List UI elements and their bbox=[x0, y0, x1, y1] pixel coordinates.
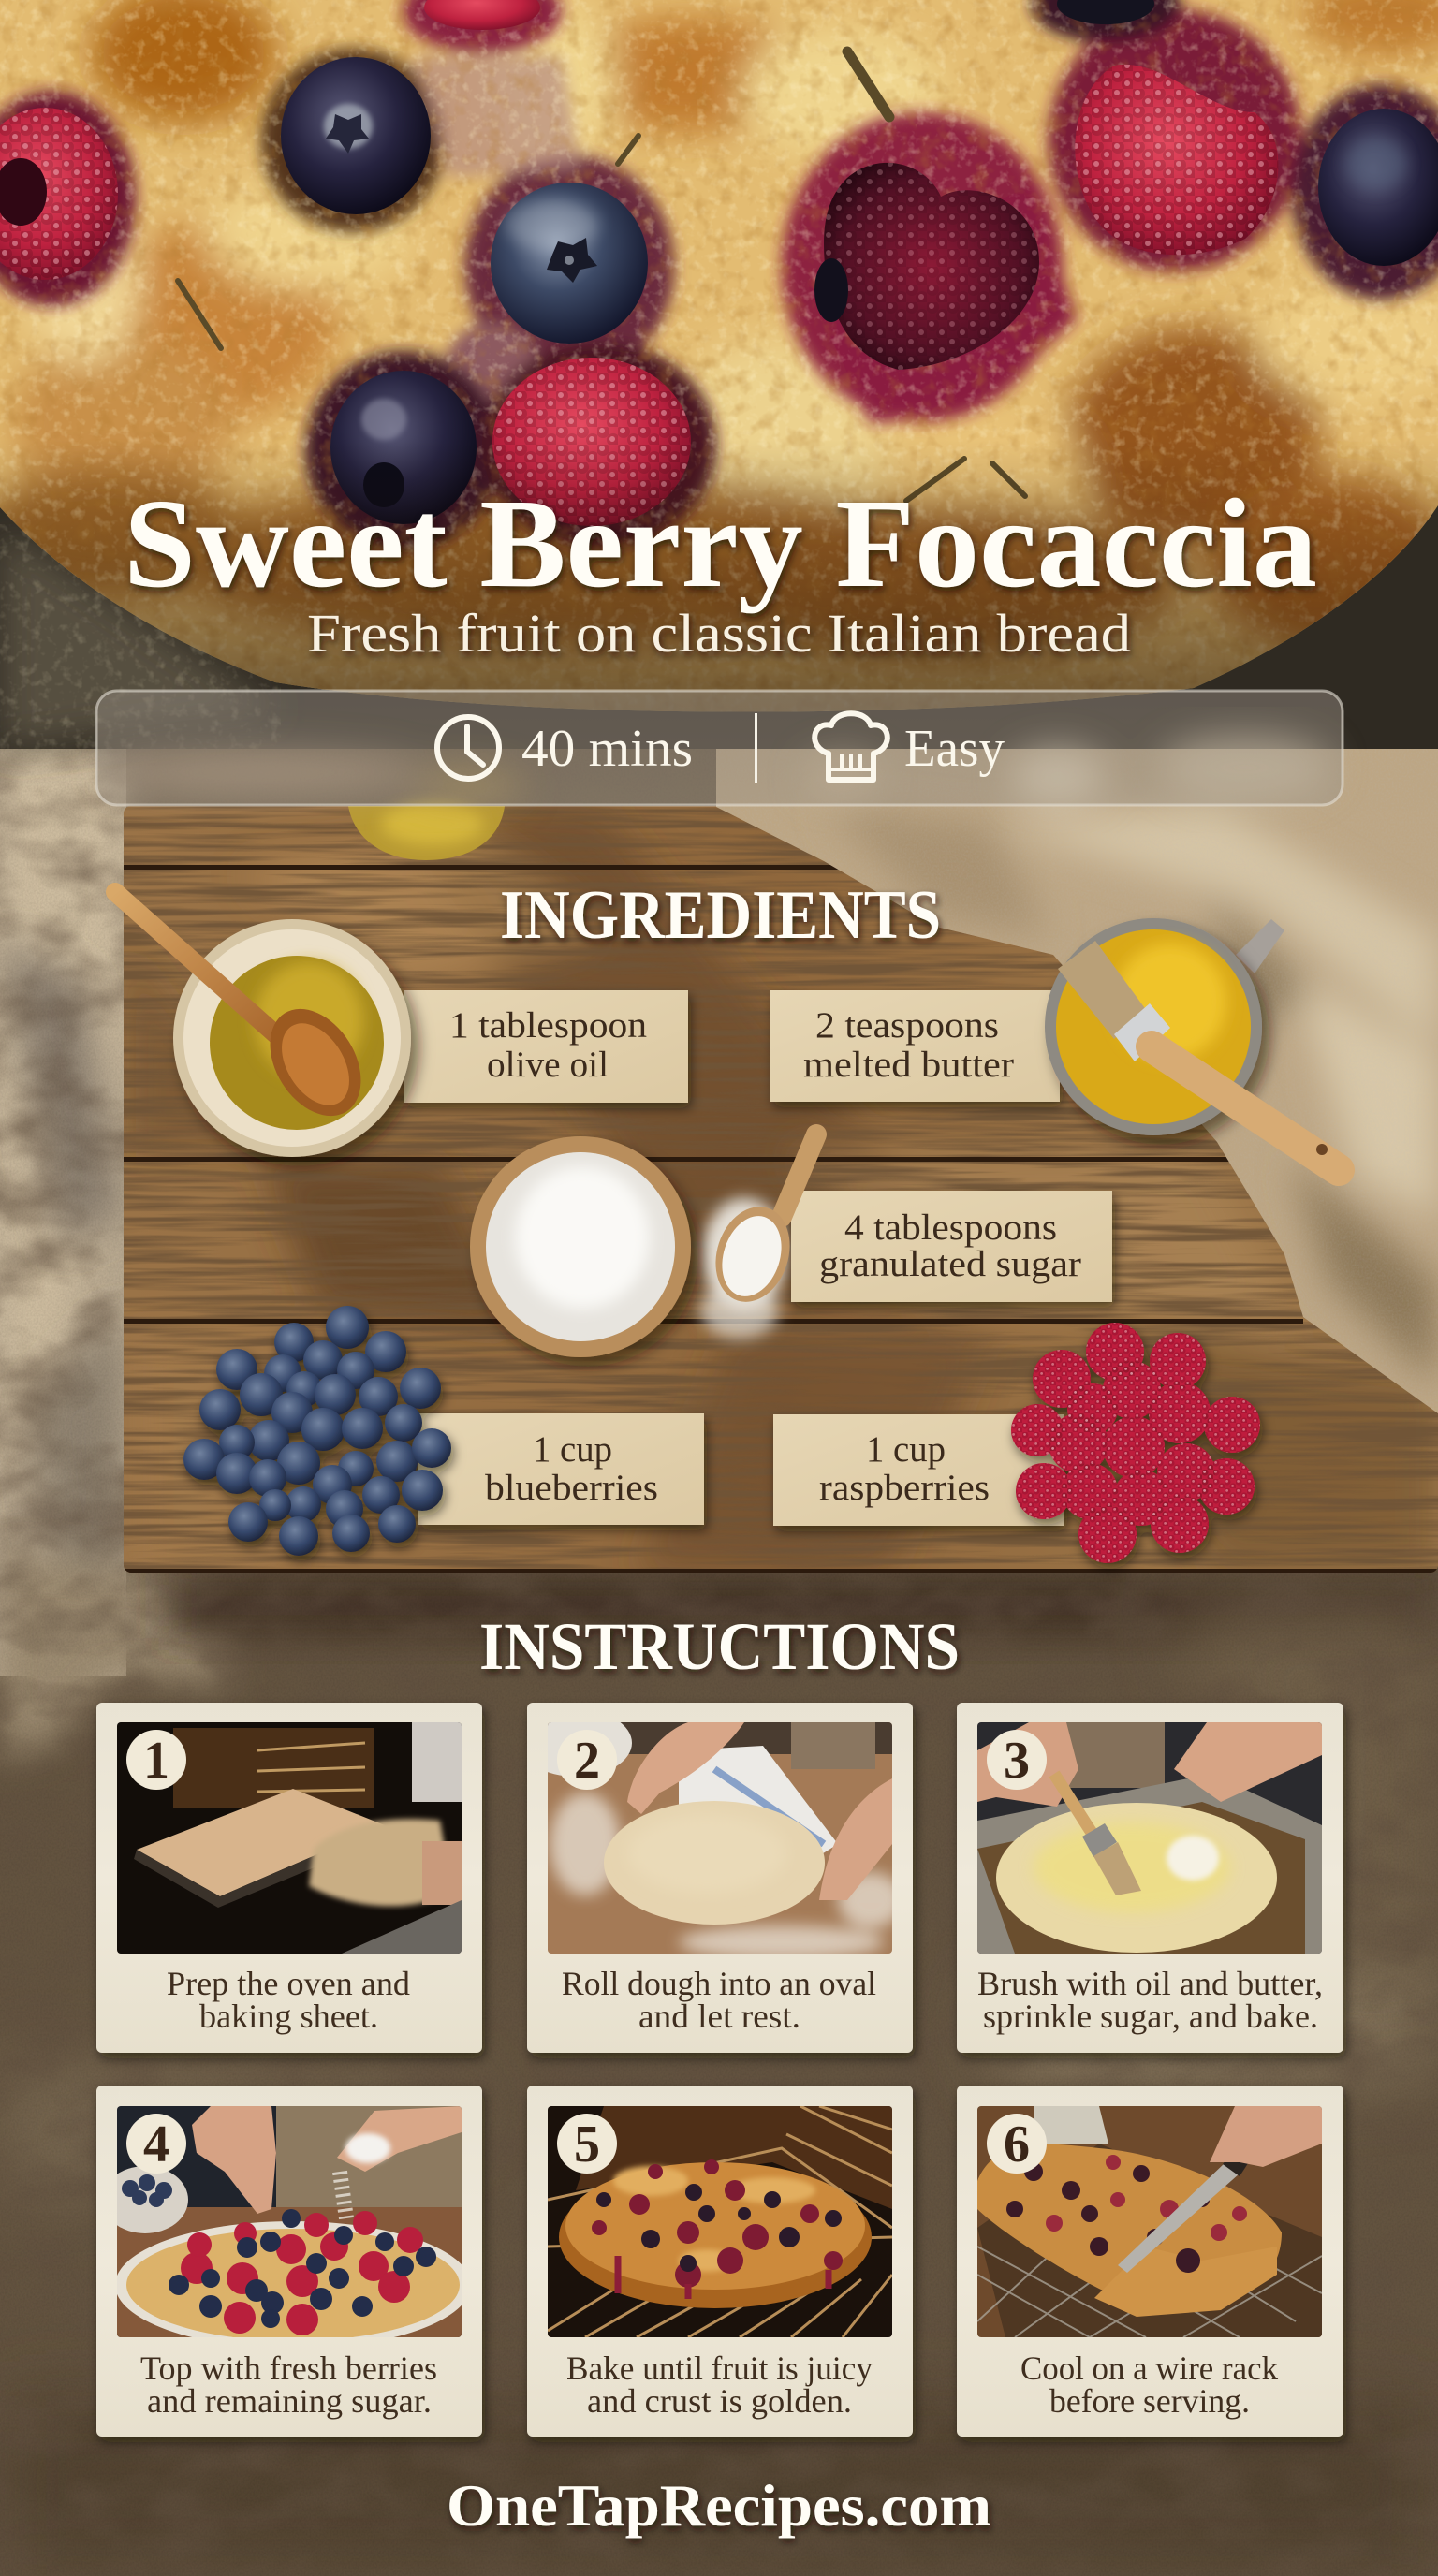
step 3 number: 3 bbox=[1004, 1732, 1030, 1790]
icon: sugar bowl bbox=[470, 1136, 691, 1357]
step 3 number bbox=[987, 1730, 1047, 1790]
step 5 number: 5 bbox=[574, 2115, 600, 2174]
wooden table bbox=[124, 806, 1438, 1573]
bread bumps bbox=[0, 0, 1438, 749]
step 2 number: 2 bbox=[574, 1732, 600, 1790]
ingredient: melted butter bbox=[770, 918, 1339, 1170]
berry: baked dark raspberry bbox=[814, 163, 1039, 370]
label: blueberries: 1 cup bbox=[533, 1429, 612, 1470]
label: melted butter: 2 teaspoons bbox=[815, 1005, 999, 1046]
step 6 text: before serving. bbox=[1049, 2382, 1250, 2420]
sugar spill bbox=[700, 1198, 786, 1339]
step 1 text: baking sheet. bbox=[199, 1998, 378, 2035]
label: sugar bbox=[791, 1191, 1112, 1302]
berry: raspberry top right bbox=[1075, 65, 1278, 255]
step 4 photo: topping with berries bbox=[102, 2106, 471, 2349]
step card 3 bbox=[957, 1703, 1343, 2053]
step 2 text: and let rest. bbox=[638, 1998, 800, 2035]
berry: raspberry top edge bbox=[424, 0, 540, 30]
step 4 text: and remaining sugar. bbox=[147, 2382, 432, 2420]
label: sugar: 4 tablespoons bbox=[844, 1208, 1057, 1248]
label: melted butter: melted butter bbox=[803, 1045, 1014, 1085]
step 1 number bbox=[126, 1730, 186, 1790]
icon: butter pan with brush bbox=[1045, 918, 1339, 1170]
label: sugar: granulated sugar bbox=[819, 1244, 1081, 1284]
step 6 number bbox=[987, 2114, 1047, 2174]
step 5 text: and crust is golden. bbox=[587, 2382, 852, 2420]
step 5 number bbox=[557, 2114, 617, 2174]
step 6 photo: cooling and slicing bbox=[977, 2106, 1322, 2337]
berry: raspberry left bbox=[0, 108, 118, 280]
ingredient: sugar bbox=[470, 1134, 1112, 1357]
berry: blueberry right bbox=[1318, 109, 1438, 266]
plank gaps bbox=[124, 865, 1438, 1573]
step 4 number: 4 bbox=[143, 2115, 169, 2174]
herb flecks bbox=[178, 51, 1025, 501]
footer website: OneTapRecipes.com bbox=[447, 2472, 991, 2539]
step card 1 bbox=[96, 1703, 482, 2053]
berry: blueberry centre bbox=[491, 183, 648, 344]
berry: raspberry lower bbox=[492, 358, 691, 526]
divider bbox=[755, 713, 757, 783]
icon: clock bbox=[437, 717, 499, 779]
title: Sweet Berry Focaccia bbox=[124, 474, 1317, 614]
label: olive oil: olive oil bbox=[487, 1045, 609, 1085]
step 5 text bbox=[566, 2349, 873, 2420]
icon: blueberry pile bbox=[183, 1306, 451, 1556]
step 4 text bbox=[140, 2349, 437, 2420]
difficulty text: Easy bbox=[904, 720, 1005, 778]
label: olive oil: 1 tablespoon bbox=[449, 1005, 647, 1046]
linen towel bbox=[712, 749, 1438, 1423]
step 2 text: Roll dough into an oval bbox=[562, 1965, 876, 2002]
step 1 text bbox=[167, 1965, 410, 2035]
step 6 number: 6 bbox=[1004, 2115, 1030, 2174]
icon: raspberry pile bbox=[1011, 1323, 1260, 1563]
ingredient: blueberries bbox=[183, 1306, 704, 1556]
berry: blueberry lower bbox=[330, 371, 477, 524]
step card 6 bbox=[957, 2086, 1343, 2437]
step 4 text: Top with fresh berries bbox=[140, 2349, 437, 2387]
step 5 text: Bake until fruit is juicy bbox=[566, 2349, 873, 2387]
step 1 photo: tray going into the oven bbox=[117, 1722, 462, 1954]
label: olive oil bbox=[404, 990, 688, 1103]
ingredient: raspberries bbox=[773, 1323, 1260, 1563]
table and cloth scene bbox=[124, 749, 1438, 1573]
jam halos bbox=[0, 0, 1438, 548]
step card 2 bbox=[520, 1703, 913, 2053]
step 2 photo: rolling dough bbox=[520, 1709, 903, 1959]
label: melted butter bbox=[770, 990, 1060, 1102]
step 5 photo: baking in the oven bbox=[548, 2106, 892, 2337]
ingredient: olive oil bbox=[115, 892, 688, 1157]
label: raspberries: 1 cup bbox=[866, 1429, 946, 1470]
icon: chef hat bbox=[814, 713, 888, 780]
step card 5 bbox=[527, 2086, 913, 2437]
label: blueberries bbox=[418, 1413, 704, 1525]
step card 4 bbox=[96, 2086, 482, 2437]
berry: blueberry top edge bbox=[1057, 0, 1154, 24]
step 1 number: 1 bbox=[143, 1732, 169, 1790]
time text: 40 mins bbox=[521, 720, 693, 778]
step 3 text: Brush with oil and butter, bbox=[977, 1965, 1323, 2002]
subtitle: Fresh fruit on classic Italian bread bbox=[307, 603, 1131, 664]
step 3 photo: brushing with butter bbox=[977, 1722, 1322, 1954]
icon: sugar scoop bbox=[704, 1134, 816, 1311]
step 4 number bbox=[126, 2114, 186, 2174]
step 3 text: sprinkle sugar, and bake. bbox=[983, 1998, 1318, 2035]
label: raspberries bbox=[773, 1414, 1064, 1526]
step 2 number bbox=[557, 1730, 617, 1790]
icon: oil bowl with spoon bbox=[115, 892, 411, 1157]
label: raspberries: raspberries bbox=[819, 1468, 990, 1508]
olive oil bottle bbox=[348, 803, 505, 860]
stats bar: time and difficulty bbox=[96, 691, 1343, 805]
heading: instructions: INSTRUCTIONS bbox=[479, 1609, 960, 1684]
step 6 text bbox=[1020, 2349, 1278, 2420]
berry: blueberry top bbox=[281, 57, 431, 214]
step 1 text: Prep the oven and bbox=[167, 1965, 410, 2002]
heading: ingredients: INGREDIENTS bbox=[500, 877, 941, 954]
step 6 text: Cool on a wire rack bbox=[1020, 2349, 1278, 2387]
label: blueberries: blueberries bbox=[485, 1468, 658, 1508]
status bar backing bbox=[96, 691, 1343, 805]
step 2 text bbox=[562, 1965, 876, 2035]
hero photo: baked focaccia with berries bbox=[0, 0, 1438, 749]
step 3 text bbox=[977, 1965, 1323, 2035]
